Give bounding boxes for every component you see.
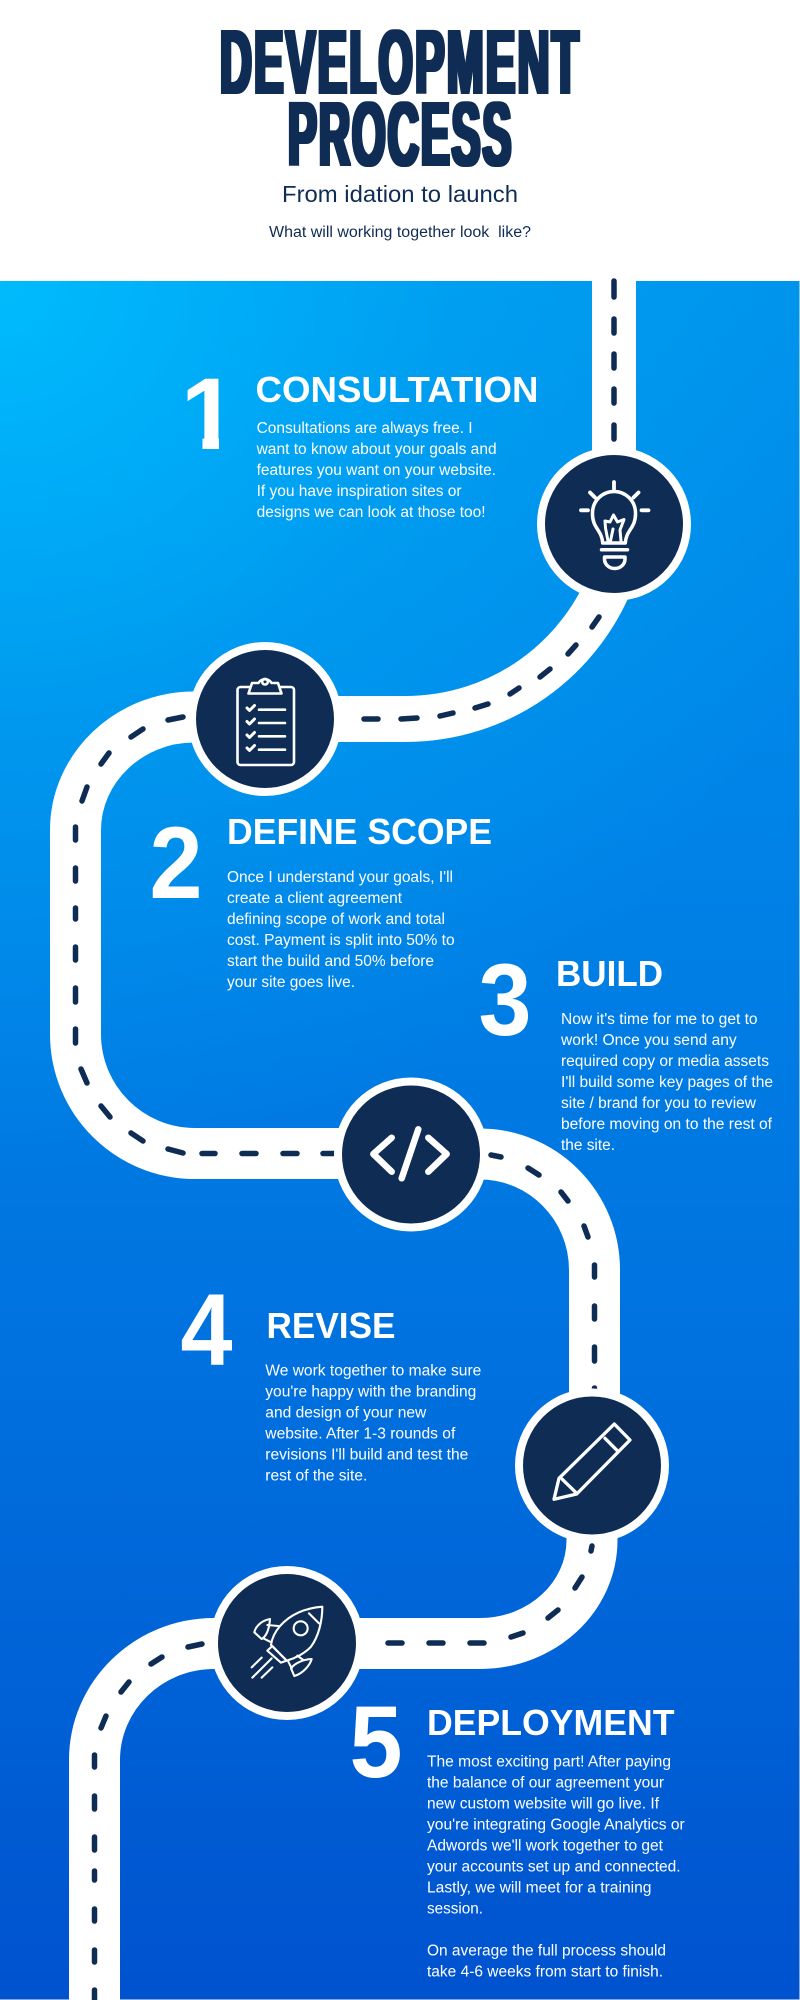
body text: the site. — [561, 1137, 615, 1154]
body text: website. After 1-3 rounds of — [264, 1426, 456, 1442]
body text — [264, 1362, 481, 1484]
body text — [256, 420, 497, 521]
body text: before moving on to the rest of — [561, 1116, 773, 1133]
step node 2: clipboard — [192, 646, 338, 792]
body text — [427, 1754, 685, 1980]
step 1: consultation — [188, 376, 536, 520]
body text: Now it's time for me to get to — [561, 1011, 758, 1028]
body text: site / brand for you to review — [561, 1095, 757, 1112]
body text: Adwords we'll work together to get — [427, 1838, 664, 1854]
body text: Once I understand your goals, I'll — [227, 869, 453, 886]
step 5: deployment — [350, 1685, 685, 1980]
intro question: What will working together look like? — [269, 224, 531, 241]
subtitle: From idation to launch — [282, 181, 518, 207]
body text: revisions I'll build and test the — [265, 1446, 468, 1464]
body text: I'll build some key pages of the — [561, 1074, 773, 1091]
step 4: revise — [180, 1273, 481, 1484]
heading: CONSULTATION — [256, 369, 538, 410]
icon: code brackets — [373, 1129, 447, 1178]
number 2: 2 — [150, 806, 202, 920]
number 4: 4 — [180, 1273, 233, 1387]
step node 5: rocket — [214, 1570, 360, 1716]
body text: The most exciting part! After paying — [427, 1754, 671, 1770]
body text: want to know about your goals and — [256, 441, 497, 458]
body text — [560, 1011, 773, 1154]
heading: REVISE — [266, 1305, 396, 1346]
heading: DEPLOYMENT — [427, 1702, 674, 1743]
number 3: 3 — [478, 943, 532, 1057]
icon: pencil — [554, 1424, 630, 1499]
body text: defining scope of work and total — [227, 911, 445, 928]
body text: work! Once you send any — [560, 1032, 737, 1049]
step node 4: pencil — [519, 1392, 665, 1538]
body text: take 4-6 weeks from start to finish. — [427, 1964, 663, 1980]
winding road — [76, 281, 614, 2000]
body text: new custom website will go live. If — [427, 1796, 660, 1812]
body text: your site goes live. — [227, 974, 355, 991]
number 5: 5 — [350, 1685, 402, 1799]
body text: designs we can look at those too! — [257, 504, 486, 521]
number 1: 1 — [181, 357, 237, 471]
body text: session. — [427, 1900, 483, 1918]
body text: the balance of our agreement your — [427, 1774, 664, 1792]
body text: features you want on your website. — [257, 462, 496, 479]
body text: required copy or media assets — [561, 1053, 769, 1070]
icon: rocket — [252, 1607, 322, 1678]
title: PROCESS — [288, 83, 513, 184]
icon: lightbulb — [581, 482, 648, 569]
body text: We work together to make sure — [265, 1362, 481, 1380]
body text: rest of the site. — [265, 1468, 367, 1484]
body text: If you have inspiration sites or — [257, 483, 462, 500]
title — [220, 13, 581, 184]
body text: Lastly, we will meet for a training — [427, 1880, 652, 1896]
step 2: define scope — [150, 806, 492, 991]
body text: you're happy with the branding — [265, 1384, 476, 1400]
body text: Consultations are always free. I — [257, 420, 473, 437]
step node 1: lightbulb — [541, 451, 687, 597]
heading: BUILD — [556, 953, 663, 994]
step 3: build — [478, 943, 773, 1154]
heading: DEFINE SCOPE — [227, 811, 492, 852]
body text: On average the full process should — [427, 1942, 666, 1960]
body text: you're integrating Google Analytics or — [427, 1816, 685, 1834]
body text: cost. Payment is split into 50% to — [227, 932, 455, 949]
step node 3: code — [338, 1082, 484, 1228]
title: DEVELOPMENT — [220, 13, 581, 113]
body text: your accounts set up and connected. — [427, 1858, 681, 1876]
body text: and design of your new — [265, 1404, 427, 1422]
icon: clipboard checklist — [238, 679, 294, 765]
body text — [227, 869, 455, 991]
body text: start the build and 50% before — [227, 953, 434, 970]
body text: create a client agreement — [227, 890, 403, 907]
road centre dashes — [76, 281, 614, 2000]
